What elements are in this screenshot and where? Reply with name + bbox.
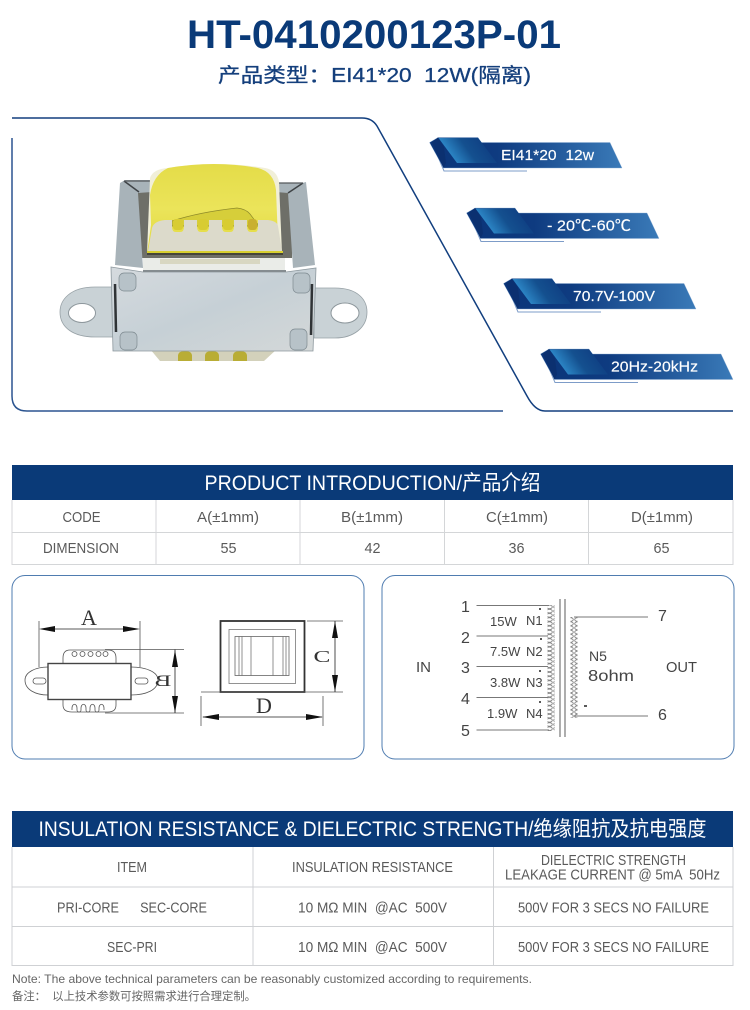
table row: pri-core: 500V FOR 3 SECS NO FAILURE xyxy=(518,900,709,916)
table row: item: INSULATION RESISTANCE xyxy=(292,859,453,876)
schematic labels: 8ohm xyxy=(588,668,634,685)
subtitle: 产品类型：EI41*20 12W(隔离) xyxy=(218,64,531,87)
spec banner: frequency: 20Hz-20kHz xyxy=(611,358,698,376)
brackets xyxy=(115,180,152,268)
schematic labels: 1.9W xyxy=(487,706,518,721)
schematic coils xyxy=(548,605,578,731)
table row: sec-pri xyxy=(107,939,709,956)
schematic labels: IN xyxy=(416,659,431,676)
schematic labels: 7.5W xyxy=(490,644,521,659)
panel: product photo outline xyxy=(12,118,733,411)
table row: dimension: 65 xyxy=(654,540,670,557)
schematic labels: N4 xyxy=(526,706,543,721)
schematic labels: N3 xyxy=(526,675,543,690)
table header xyxy=(12,465,733,500)
spec banner: temperature xyxy=(466,208,659,242)
product introduction table xyxy=(12,465,733,564)
table header: PRODUCT INTRODUCTION/产品介绍 xyxy=(204,472,540,495)
coil xyxy=(147,164,282,253)
table row: dimension: 55 xyxy=(220,540,236,557)
schematic labels: 3 xyxy=(461,660,470,677)
table header: INSULATION RESISTANCE & DIELECTRIC STRENGTH/绝缘阻抗及抗电强度 xyxy=(38,818,706,841)
insulation resistance table xyxy=(12,811,733,966)
schematic labels: 2 xyxy=(461,630,470,647)
schematic labels: 5 xyxy=(461,723,470,740)
schematic labels: OUT xyxy=(666,659,697,676)
front plate xyxy=(111,267,316,351)
table row: sec-pri: 10 MΩ MIN @AC 500V xyxy=(298,939,447,956)
table row: pri-core xyxy=(57,900,709,916)
schematic wires xyxy=(476,599,648,737)
spec banner: size: EI41*20 12w xyxy=(501,147,594,164)
lugs xyxy=(60,287,116,337)
schematic labels: 4 xyxy=(461,691,470,708)
schematic labels: N1 xyxy=(526,613,543,628)
panel: dimension drawing xyxy=(12,576,364,759)
panel: circuit schematic xyxy=(382,576,734,759)
table header xyxy=(12,811,733,847)
table row: dimension: DIMENSION xyxy=(43,540,119,557)
bottom bobbin xyxy=(150,349,277,361)
label D: D xyxy=(256,693,272,718)
title: HT-0410200123P-01 xyxy=(187,13,561,57)
table row: pri-core: PRI-CORE SEC-CORE xyxy=(57,900,207,916)
spec banner: frequency xyxy=(540,349,733,382)
schematic labels: 3.8W xyxy=(490,675,521,690)
front view drawing xyxy=(201,621,343,726)
note: english: Note: The above technical parameters can be reasonably customized according to requirements. xyxy=(12,972,532,986)
schematic labels: N2 xyxy=(526,644,543,659)
table row: code: CODE xyxy=(62,509,100,526)
schematic labels: 15W xyxy=(490,614,517,629)
table row: item: DIELECTRIC STRENGTH xyxy=(541,852,686,869)
schematic labels: 6 xyxy=(658,707,667,724)
schematic labels: 7 xyxy=(658,608,667,625)
label C: C xyxy=(314,647,330,666)
note: chinese: 备注： 以上技术参数可按照需求进行合理定制。 xyxy=(12,989,256,1003)
spec banner: temperature: - 20℃-60℃ xyxy=(547,218,631,234)
bobbin flange xyxy=(148,220,282,251)
label B: B xyxy=(155,672,171,690)
side view drawing xyxy=(25,621,184,713)
table row: code xyxy=(62,509,693,526)
table row: dimension: 42 xyxy=(364,540,380,557)
label A: A xyxy=(81,605,97,630)
table row: code: A(±1mm) xyxy=(197,509,259,526)
schematic labels: N5 xyxy=(589,648,607,664)
table row: item: ITEM xyxy=(117,859,147,876)
corner tabs xyxy=(119,273,136,291)
table row: item xyxy=(117,852,720,884)
table row: item: LEAKAGE CURRENT @ 5mA 50Hz xyxy=(505,866,720,884)
spec banner: voltage: 70.7V-100V xyxy=(573,288,655,305)
schematic polarity dots xyxy=(540,608,587,706)
table row: sec-pri: 500V FOR 3 SECS NO FAILURE xyxy=(518,939,709,956)
schematic labels xyxy=(416,599,697,740)
table row: code: C(±1mm) xyxy=(486,509,548,526)
table row: dimension xyxy=(43,540,670,557)
schematic labels: 1 xyxy=(461,599,470,616)
table row: pri-core: 10 MΩ MIN @AC 500V xyxy=(298,900,447,916)
spec banner: size xyxy=(430,138,622,171)
spec banner: voltage xyxy=(504,278,696,312)
table row: code: D(±1mm) xyxy=(631,509,693,526)
table row: code: B(±1mm) xyxy=(341,509,403,526)
table row: sec-pri: SEC-PRI xyxy=(107,939,157,956)
table row: dimension: 36 xyxy=(508,540,524,557)
product photo: transformer xyxy=(60,164,367,361)
